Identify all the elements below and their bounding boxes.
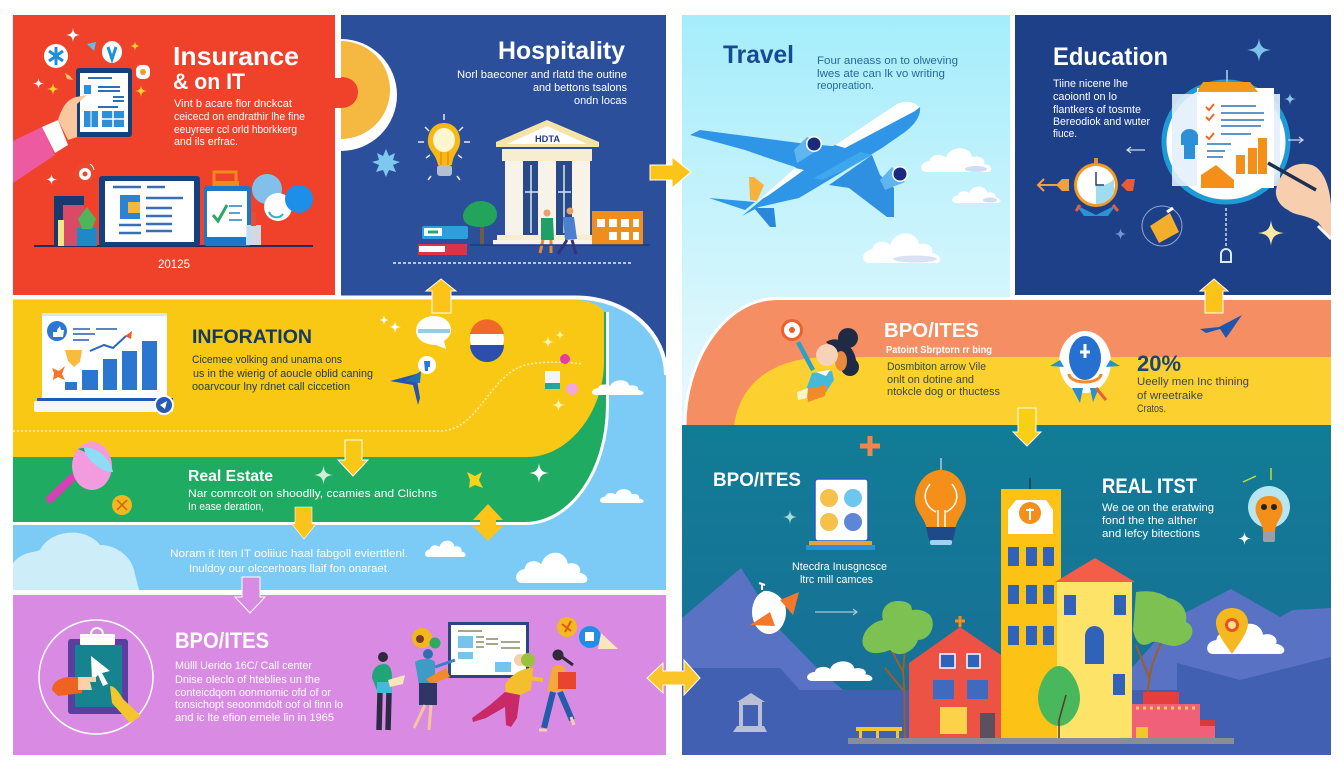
- panel: BPO/ITES call center: [13, 577, 666, 755]
- panel: travel: [682, 15, 1010, 425]
- heading: insurance: Insurance: [173, 41, 299, 71]
- icon: bench: [856, 727, 902, 738]
- arrow: up to education: [1200, 279, 1228, 313]
- icon: striped flag circle: [470, 319, 504, 362]
- text block: small teal caption: Ntecdra Inusgncsce: [792, 561, 887, 573]
- panel: education: [1015, 15, 1331, 295]
- panel: information band: [13, 300, 604, 499]
- text block: BPO intro: Patoint Sbrptorn rr bing: [886, 345, 992, 356]
- text block: small teal caption: [792, 561, 887, 586]
- arrow: down to sky band: [292, 507, 316, 539]
- icon: child reaching for badge: [782, 320, 859, 402]
- icon: orange building: [592, 211, 643, 245]
- arrow: up to hospitality: [426, 279, 456, 313]
- text block: real estate description: In ease deration,: [188, 501, 264, 513]
- text block: sky band description: Inuldoy our olccerhoars llaif fon onaraet.: [189, 563, 390, 575]
- text block: education description: Bereodiok and wuter: [1053, 116, 1150, 128]
- text block: hospitality description: ondn locas: [574, 95, 627, 107]
- icon: magnified report: [1164, 70, 1288, 202]
- text block: BPO orange description: onlt on dotine and: [887, 374, 974, 386]
- heading: real estate right: REAL ITST: [1102, 475, 1197, 498]
- icon: pink building: [1132, 692, 1215, 738]
- text block: real estate right description: and lefcy bitections: [1102, 528, 1201, 540]
- icon: two visitors walking: [540, 208, 577, 254]
- icon: sparkles on green: [314, 463, 549, 488]
- text block: stat description: [1137, 376, 1249, 415]
- heading: BPO/ITES: BPO/ITES: [175, 628, 269, 653]
- text block: insurance description: ceicecd on endrathir lhe fine: [174, 111, 305, 123]
- icon: books: [418, 226, 468, 255]
- text block: travel description: Four aneass on to olweving: [817, 55, 958, 67]
- text block: information description: [192, 354, 373, 393]
- icon: small temple: [733, 693, 767, 732]
- text block: BPO description: Mülll Uerido 16C/ Call center: [175, 660, 312, 672]
- text block: BPO orange description: ntokcle dog or thuctess: [887, 386, 1000, 398]
- icon: pale yellow building with red roof: [1055, 558, 1135, 738]
- text block: insurance description: eeuyreer ccl orld hborkkerg: [174, 124, 297, 136]
- heading: BPO/ITES teal: BPO/ITES: [713, 470, 801, 491]
- icon: cloud with map pin: [1207, 608, 1284, 654]
- icon: magnifier: [50, 442, 113, 499]
- text block: education description: flantkers of tosmte: [1053, 104, 1141, 116]
- heading: travel: Travel: [723, 41, 794, 69]
- text block: insurance description: Vint b acare flor dnckcat: [174, 98, 292, 110]
- icon: rocket badge: [1050, 331, 1120, 403]
- text block: BPO description: tonsichopt seoonmdolt oof ol finn lo: [175, 699, 343, 711]
- icon: bird: [750, 583, 799, 634]
- text block: BPO orange description: Dosmbiton arrow Vile: [887, 361, 986, 373]
- icon: sparkles on teal: [783, 436, 1251, 545]
- text block: BPO orange description: [887, 361, 1000, 398]
- icon: clipboard in circle: [39, 620, 153, 734]
- text block: real estate right description: We oe on the eratwing: [1102, 502, 1214, 514]
- heading: real estate: Real Estate: [188, 468, 273, 485]
- text block: education description: [1053, 78, 1150, 140]
- text block: sky band description: [170, 548, 408, 575]
- icon: clouds: [863, 148, 1001, 263]
- text block: real estate description: [188, 488, 438, 513]
- heading: insurance: & on IT: [173, 69, 246, 94]
- decorative semicircle with red tab: [335, 39, 397, 151]
- text block: BPO description: Dnise oleclo of hteblies un the: [175, 674, 320, 686]
- text block: hospitality description: Norl baeconer and rlatd the outine: [457, 69, 627, 81]
- icon: bag in a circle: [1142, 206, 1182, 246]
- icon: speech bubble: [416, 316, 451, 349]
- text block: stat description: of wreetraike: [1137, 390, 1203, 402]
- panel: hospitality: [335, 15, 666, 375]
- arrow: double vertical: [473, 504, 503, 541]
- heading: information: INFORATION: [192, 327, 312, 348]
- heading: BPO/ITES orange: BPO/ITES: [884, 320, 979, 342]
- icon: orange light bulb: [915, 458, 966, 545]
- icon: hand holding pen: [1268, 163, 1331, 240]
- icon: face bulb: [1243, 468, 1290, 542]
- arrow: purple down: [235, 577, 265, 613]
- text block: small teal caption: ltrc mill camces: [800, 574, 873, 586]
- icon: coin: [112, 495, 132, 515]
- text block: stat description: Ueelly men Inc thining: [1137, 376, 1249, 388]
- icon: star: [372, 149, 400, 177]
- text block: insurance description: [174, 98, 305, 148]
- text block: BPO description: conteicdqom oonmomic ofd of or: [175, 687, 331, 699]
- mountains: [682, 568, 1331, 755]
- icon: sparkles and small arrows: [1114, 38, 1303, 262]
- text block: travel description: reopreation.: [817, 80, 874, 92]
- panel: real estate city scene: [682, 425, 1331, 755]
- text block: hospitality description: and bettons tsalons: [533, 82, 627, 94]
- icon: HDTA building: [493, 120, 600, 245]
- text block: insurance description: and ils erfrac.: [174, 136, 238, 148]
- text block: real estate right description: [1102, 502, 1214, 540]
- panel: real estate band: [13, 312, 608, 524]
- panel: right orange and yellow arc: [685, 298, 1331, 425]
- text block: education description: fiuce.: [1053, 128, 1077, 140]
- icon: light bulb: [418, 114, 470, 180]
- icon: tree: [463, 201, 497, 245]
- text block: information description: us in the wierig of aoucle oblid caning: [193, 368, 373, 380]
- icon: HDTA building: HDTA: [535, 134, 561, 144]
- arrow: double horizontal between columns: [647, 660, 700, 695]
- text block: real estate right description: fond the the alther: [1102, 515, 1197, 527]
- heading: education: Education: [1053, 43, 1168, 71]
- icon: bird with badge: [390, 356, 436, 405]
- icon: yellow tower: [1001, 478, 1061, 738]
- icon: small floating badges: [557, 617, 618, 649]
- panel: left curved flow: [13, 297, 666, 590]
- text block: travel description: lwes ate can lk vo writing: [817, 68, 945, 80]
- arrow: hospitality to travel: [650, 157, 691, 188]
- icon: red badge: [75, 162, 95, 182]
- heading: insurance: [173, 41, 299, 94]
- icon: blue plane: [1200, 315, 1242, 338]
- icon: hand holding tablet: [13, 68, 132, 183]
- text block: travel description: [817, 55, 958, 92]
- icon: floating app badges: [33, 28, 150, 97]
- icon: trees: [862, 591, 1192, 744]
- text block: real estate description: Nar comrcolt on shoodlly, ccamies and Clichns: [188, 488, 438, 500]
- text block: sky band description: Noram it Iten IT ooliiuc haal fabgoll evierttlenl.: [170, 548, 408, 560]
- icon: clouds on sky band: [13, 380, 644, 590]
- year label: 20125: [158, 257, 190, 271]
- text block: education description: Tiine nicene lhe: [1053, 78, 1128, 90]
- heading: hospitality: Hospitality: [498, 37, 625, 65]
- panel: insurance and IT: [13, 15, 335, 295]
- icon: clock with arrows: [1038, 158, 1135, 216]
- icon: red house: [909, 616, 1001, 738]
- icon: sparkles and small items on yellow: [379, 315, 578, 412]
- icon: team of four people: [372, 628, 576, 730]
- text block: BPO description: and ic lte efion ernele lin in 1965: [175, 712, 334, 724]
- arrow: down inside information: [338, 440, 368, 476]
- stat: 20 percent: 20%: [1137, 351, 1181, 376]
- text block: stat description: Cratos.: [1137, 403, 1166, 415]
- icon: palette card: [806, 479, 875, 550]
- text block: hospitality description: [457, 69, 627, 107]
- icon: desk with monitor and clipboard: [34, 172, 313, 247]
- text block: education description: caoiontl on lo: [1053, 91, 1117, 103]
- chart: rising bars on presentation board: [34, 313, 173, 414]
- text block: BPO description: [175, 660, 343, 724]
- text block: information description: Cicemee volking and unama ons: [192, 354, 342, 366]
- icon: airplane: [690, 102, 920, 227]
- icon: presentation board: [448, 622, 529, 678]
- icon: cloud and thin arrow: [807, 609, 872, 681]
- arrow: down to city scene: [1013, 408, 1041, 446]
- text block: information description: ooarvcour lny rdnet call ciccetion: [192, 381, 350, 393]
